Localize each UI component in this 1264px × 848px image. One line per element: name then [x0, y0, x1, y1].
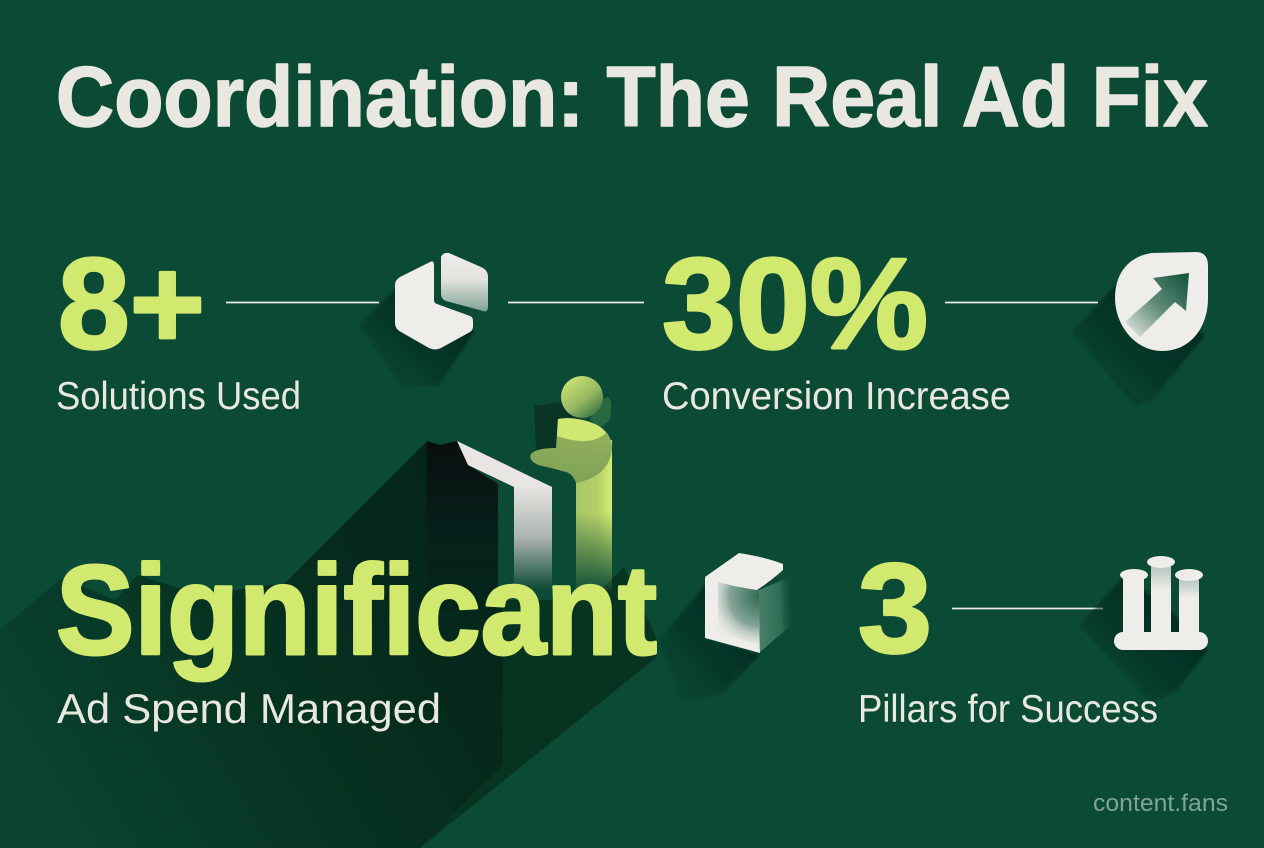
stat label conversion increase: Conversion Increase: [662, 375, 1011, 418]
stat: 8+ solutions used: [56, 232, 301, 418]
icon: cube: [660, 553, 795, 700]
stat: significant ad spend managed: [56, 539, 657, 732]
figure arm behind head: [590, 397, 611, 428]
watermark: content.fans: [1093, 790, 1228, 817]
podium dark side: [427, 441, 498, 610]
podium white top: [457, 441, 552, 487]
stat label solutions used: Solutions Used: [56, 375, 301, 418]
icon: arrow badge: [1072, 252, 1208, 405]
stat value 3: 3: [858, 537, 932, 679]
stat: 3 pillars for success: [858, 537, 1158, 731]
connector line row two: [952, 608, 1103, 610]
figure body column: [576, 440, 612, 590]
stat value significant: Significant: [56, 539, 657, 681]
stat value 30%: 30%: [662, 232, 928, 376]
connector lines row one: [226, 302, 1098, 304]
figure torso: [530, 418, 612, 483]
figure chest highlight: [557, 418, 606, 441]
figure shadow block: [534, 402, 582, 450]
long shadow behind podium and headline: [0, 441, 657, 848]
icon: hexagon pie: [360, 253, 488, 386]
illustration: podium and figure: [427, 376, 612, 610]
stat label pillars for success: Pillars for Success: [858, 688, 1158, 731]
title: Coordination: The Real Ad Fix: [56, 50, 1208, 145]
stat: 30% conversion increase: [662, 232, 1011, 418]
podium white leg: [514, 487, 552, 590]
stat value 8+: 8+: [58, 232, 205, 376]
icon: three pillars: [1080, 556, 1208, 702]
figure head: [561, 376, 603, 418]
stat label ad spend managed: Ad Spend Managed: [57, 685, 441, 732]
